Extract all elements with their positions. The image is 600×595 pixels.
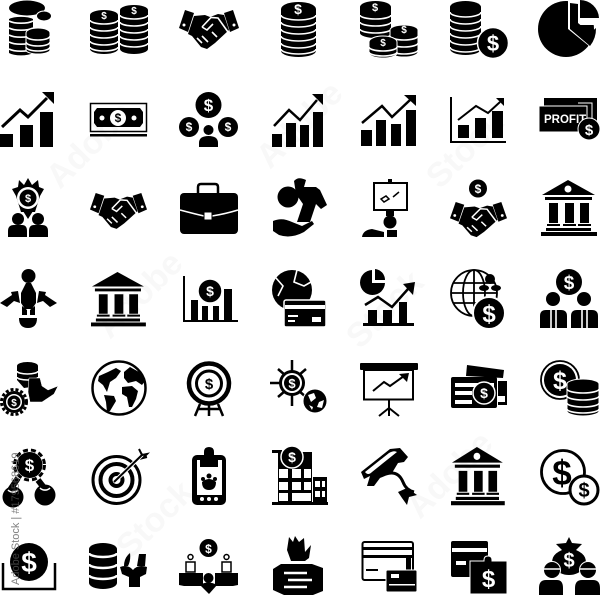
- icon: handshake with coin: $: [475, 182, 482, 196]
- icon: falling bar chart with coin: [184, 276, 238, 321]
- icon: two coin stacks: $: [131, 6, 137, 17]
- icon: money bag with two people: [539, 537, 600, 595]
- icon: projection screen with chart: [360, 363, 418, 416]
- icon: three coin stacks: $: [380, 38, 386, 49]
- icon: globe with credit card: [272, 270, 326, 327]
- icon: badge with two nodes: $: [25, 456, 35, 475]
- icon: pie chart: [538, 0, 600, 57]
- icon: two dollar coins: [542, 450, 598, 504]
- icon: bar chart with arrow: [0, 92, 54, 147]
- icon: cash cards with coin: $: [480, 385, 488, 401]
- icon: dollar coin in tray: [3, 543, 55, 589]
- icon: two dollar coins: $: [578, 480, 590, 502]
- icon: coin and stack: $: [553, 367, 567, 395]
- icon: line and bar chart with axes: [451, 97, 506, 142]
- icon: banknote: $: [115, 111, 122, 125]
- icon: target with arrow: [93, 449, 147, 504]
- icon: gear with globe: [270, 360, 327, 413]
- icon: three coin stacks: $: [401, 25, 407, 36]
- icon: dollar coin in tray: $: [21, 547, 37, 578]
- icon: cash cards with coin: [451, 365, 507, 408]
- icon: gear with globe: $: [288, 376, 296, 391]
- icon: hand holding bags: [273, 178, 327, 236]
- background watermark: Adobe: [249, 74, 350, 176]
- icon: hand with coins and gear: [2, 362, 58, 414]
- icon: coin stack with dollar coin: $: [487, 31, 499, 56]
- icon: profit cards with coin: [539, 98, 600, 140]
- icon: card with dollar bag: $: [482, 566, 496, 593]
- icon: dollar target on tripod: $: [205, 376, 214, 393]
- icon: badge with two nodes: [2, 450, 56, 508]
- icon: profit cards with coin: $: [585, 122, 594, 139]
- icon: bank with circle: [451, 447, 505, 505]
- icon: bank: [91, 272, 146, 326]
- icon: idea burst with two people: [8, 178, 48, 237]
- icon: bank with circle: [541, 180, 597, 236]
- icon: handshake: [179, 10, 239, 49]
- background watermark: Stock: [339, 263, 431, 356]
- icon: hand with card: [273, 536, 323, 595]
- icon: two coin stacks: $: [101, 11, 107, 22]
- icon: wire globe with dollar coin: [451, 270, 505, 329]
- icon: people with coin and books: [179, 539, 238, 594]
- icon: dollar target on tripod: [189, 364, 229, 416]
- icon: briefcase: [180, 184, 238, 234]
- icon: office building with coin: $: [288, 449, 296, 465]
- watermark: vertical stock id: Adobe Stock | #179568619: [10, 452, 22, 585]
- icon: database with plants: [89, 543, 147, 589]
- icon: coin and stack: [541, 361, 599, 416]
- icon: credit cards: [362, 542, 417, 592]
- icon: falling bar chart with coin: $: [206, 283, 214, 299]
- icon: person with three coins: $: [204, 96, 214, 115]
- icon: hand with coins and gear: $: [11, 398, 17, 409]
- icon: three coin stacks: $: [372, 2, 378, 14]
- icon: person with three coins: $: [225, 120, 232, 134]
- icon: bar chart with arrow: [272, 94, 323, 147]
- background watermark: Stock: [109, 473, 201, 566]
- icon: presentation board with person: [362, 179, 407, 237]
- icon: pie and growth chart: [360, 269, 415, 326]
- icon: mobile device with clip: [192, 447, 226, 505]
- icon: wire globe with dollar coin: $: [482, 301, 496, 328]
- icon: handshake with coin: [450, 180, 507, 237]
- icon: three people under coin: $: [564, 273, 575, 294]
- icon: three coin stacks: [360, 1, 418, 58]
- icon: handshake: [90, 193, 147, 229]
- icon: office building with coin: [272, 446, 328, 505]
- icon: person with three coins: $: [186, 120, 193, 134]
- icon: surveillance camera: [361, 448, 417, 505]
- icon: card with dollar bag: [451, 541, 507, 594]
- icon: idea burst with two people: $: [25, 193, 31, 205]
- icon: money bag with two people: $: [563, 550, 575, 572]
- background watermark: Adobe: [89, 244, 190, 346]
- icon: person with three coins: [179, 92, 238, 147]
- icon: coin stack with dollar coin: [450, 1, 508, 59]
- background watermark: Adobe: [39, 94, 140, 196]
- icon: banknote: [90, 104, 147, 136]
- background watermark: Adobe: [399, 424, 500, 526]
- background watermark: Stock: [419, 103, 511, 196]
- icon: earth globe: [92, 362, 146, 414]
- icon: people with coin and books: $: [205, 542, 212, 556]
- icon: three people under coin: [540, 269, 598, 328]
- icon: person with arrows: [0, 269, 57, 328]
- icon: two dollar coins: $: [552, 454, 572, 493]
- icon: bar chart with arrow: [361, 95, 416, 146]
- icon: coin stacks uneven: [9, 0, 52, 55]
- icon: tall coin stack: $: [294, 1, 302, 17]
- icon: tall coin stack: [281, 1, 316, 57]
- icon: two coin stacks: [90, 5, 148, 54]
- background watermark: [39, 74, 511, 566]
- icon: profit cards with coin: PROFIT: [544, 114, 586, 126]
